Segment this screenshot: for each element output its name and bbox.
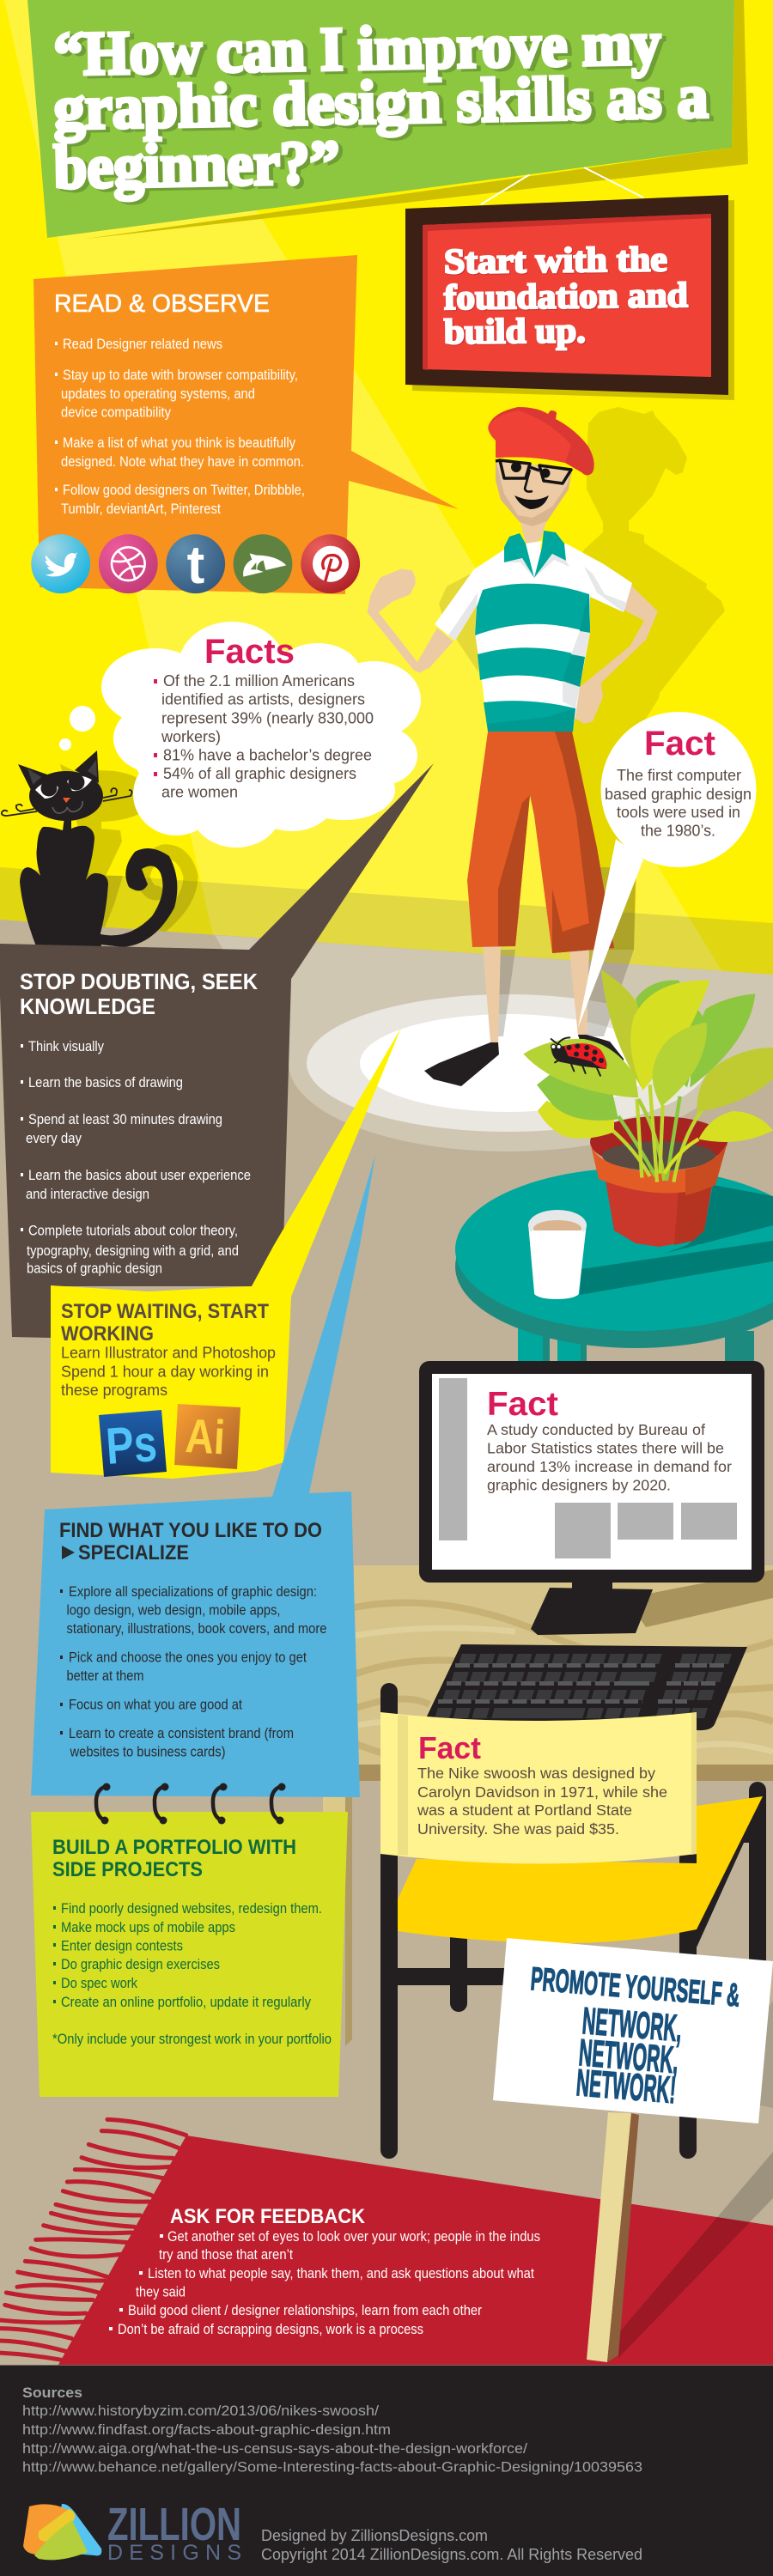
- ladybug: [551, 1037, 606, 1076]
- cat ears: [18, 764, 47, 793]
- cat shadow: [60, 764, 191, 936]
- framed sign: foundation and: [444, 275, 688, 317]
- spotlight beam: [4, 0, 724, 975]
- mouth: [514, 495, 549, 509]
- keyboard: [425, 1644, 747, 1730]
- panel: stop doubting: [0, 763, 434, 1338]
- cat: [2, 750, 177, 947]
- chair back with fact: Fact: [418, 1730, 481, 1765]
- panel: stop waiting: [51, 1028, 401, 1479]
- neck: [520, 519, 547, 545]
- nose: [525, 470, 533, 492]
- panel: facts cloud: 81% have a bachelor’s degree: [163, 747, 372, 764]
- panel: read & observe: READ & OBSERVE: [54, 290, 270, 318]
- panel: build a portfolio: *Only include your strongest work in your portfolio: [52, 2032, 332, 2047]
- chair back with fact: [380, 1712, 697, 1863]
- fact: bureau of labor statistics: Labor Statistics states there will be: [487, 1439, 724, 1456]
- chair back with fact: University. She was paid $35.: [417, 1820, 619, 1838]
- collar: [504, 531, 569, 578]
- icon: dribbble: [99, 534, 158, 593]
- panel: facts cloud: workers): [161, 728, 221, 745]
- panel: build a portfolio: Do spec work: [61, 1976, 138, 1991]
- leaves: [601, 969, 642, 1088]
- ask for feedback text: Listen to what people say, thank them, and ask questions about what: [148, 2266, 534, 2281]
- ask for feedback text: try and those that aren’t: [159, 2247, 293, 2263]
- left shoe: [424, 1042, 499, 1086]
- chair back with fact: was a student at Portland State: [417, 1801, 632, 1819]
- credits: Copyright 2014 ZillionDesigns.com. All Rights Reserved: [261, 2546, 642, 2563]
- panel: read & observe: device compatibility: [61, 405, 172, 421]
- panel: read & observe: Stay up to date with browser compatibility,: [63, 368, 298, 383]
- chair back with fact: The Nike swoosh was designed by: [417, 1765, 655, 1782]
- panel: find what you like: better at them: [67, 1668, 144, 1684]
- cat whiskers: [2, 788, 132, 816]
- panel: stop doubting: Learn the basics of drawing: [28, 1075, 183, 1091]
- panel: facts cloud: represent 39% (nearly 830,000: [161, 709, 374, 726]
- panel: stop waiting: these programs: [61, 1382, 167, 1399]
- table legs: [518, 1322, 754, 1365]
- panel: find what you like: Pick and choose the ones you enjoy to get: [69, 1650, 307, 1666]
- icon: deviantart: [234, 534, 292, 593]
- icon: photoshop: Ps: [104, 1414, 159, 1475]
- title banner: beginner?”: [53, 128, 340, 202]
- panel: facts cloud: [101, 622, 421, 848]
- panel: build a portfolio: BUILD A PORTFOLIO WITH: [52, 1836, 296, 1859]
- shorts: [467, 732, 614, 953]
- beret: [488, 407, 594, 476]
- left leg: [483, 945, 501, 1042]
- stems: [612, 1084, 702, 1182]
- cat tail: [100, 848, 177, 947]
- panel: fact bubble: the 1980’s.: [641, 823, 715, 840]
- sources: http://www.historybyzim.com/2013/06/nikes-swoosh/: [22, 2403, 379, 2419]
- panel: facts cloud: are women: [161, 783, 238, 800]
- framed sign: build up.: [444, 310, 586, 351]
- sources: http://www.behance.net/gallery/Some-Interesting-facts-about-Graphic-Designing/10039563: [22, 2459, 642, 2475]
- ask for feedback text: they said: [136, 2284, 186, 2300]
- panel: stop doubting: Think visually: [28, 1039, 105, 1054]
- cat body: [20, 817, 108, 947]
- panel: read & observe: Read Designer related news: [63, 337, 222, 352]
- glasses: [496, 460, 571, 483]
- panel: build a portfolio: Do graphic design exercises: [61, 1957, 220, 1972]
- panel: fact bubble: [578, 712, 756, 1028]
- panel: find what you like: stationary, illustrations, book covers, and more: [67, 1621, 326, 1637]
- panel: stop doubting: basics of graphic design: [27, 1261, 162, 1276]
- panel: stop doubting: STOP DOUBTING, SEEK: [20, 969, 258, 994]
- panel: build a portfolio: Make mock ups of mobile apps: [61, 1920, 235, 1935]
- panel: build a portfolio: Find poorly designed websites, redesign them.: [61, 1901, 322, 1917]
- fact: bureau of labor statistics: graphic designers by 2020.: [487, 1477, 671, 1494]
- ask for feedback text: ASK FOR FEEDBACK: [170, 2205, 366, 2228]
- frame wires: [481, 167, 643, 204]
- ask for feedback text: Get another set of eyes to look over your work; people in the indus: [167, 2229, 540, 2245]
- lit floor area: [215, 935, 773, 1151]
- panel: fact bubble: The first computer: [617, 767, 741, 784]
- icon: illustrator: Ai: [184, 1408, 227, 1464]
- flower pot: [590, 1116, 727, 1247]
- credits: Designed by ZillionsDesigns.com: [261, 2527, 488, 2544]
- panel: build a portfolio: [31, 1812, 348, 2097]
- cat head: [29, 771, 103, 821]
- panel: fact bubble: based graphic design: [605, 786, 752, 803]
- chair seat: [398, 1796, 763, 1943]
- character shadow on wall: [439, 407, 725, 950]
- panel: fact bubble: tools were used in: [617, 804, 740, 821]
- title banner: [27, 0, 734, 238]
- ask for feedback text: [109, 2205, 540, 2337]
- panel: stop doubting: every day: [26, 1131, 82, 1146]
- panel: facts cloud: 54% of all graphic designers: [163, 765, 356, 782]
- chair back with fact: Carolyn Davidson in 1971, while she: [417, 1783, 667, 1801]
- panel: find what you like: SPECIALIZE: [78, 1541, 189, 1564]
- panel: stop doubting: KNOWLEDGE: [20, 993, 155, 1019]
- icon: pinterest: [301, 534, 360, 593]
- panel: read & observe: [33, 255, 459, 594]
- credits: [261, 2527, 642, 2563]
- fact: bureau of labor statistics: A study conducted by Bureau of: [487, 1421, 705, 1438]
- fact: bureau of labor statistics: Fact: [487, 1386, 558, 1423]
- rug fringe: [0, 2119, 186, 2360]
- logo: ZILLION: [107, 2499, 241, 2550]
- icon: twitter: [31, 534, 90, 593]
- panel: find what you like: logo design, web design, mobile apps,: [67, 1602, 280, 1618]
- panel: read & observe: designed. Note what they have in common.: [61, 454, 304, 470]
- right leg: [569, 949, 589, 1036]
- panel: read & observe: updates to operating systems, and: [61, 386, 255, 402]
- panel: stop doubting: and interactive design: [26, 1187, 149, 1202]
- panel: find what you like: Learn to create a consistent brand (from: [69, 1726, 294, 1741]
- panel: fact bubble: Fact: [644, 725, 715, 762]
- chair frame: [380, 1683, 766, 2159]
- shirt: [435, 544, 632, 732]
- fact: bureau of labor statistics: around 13% increase in demand for: [487, 1458, 732, 1475]
- ask for feedback text: Don’t be afraid of scrapping designs, work is a process: [118, 2322, 423, 2337]
- panel: stop waiting: Spend 1 hour a day working in: [61, 1364, 269, 1381]
- shorts shading: [498, 732, 614, 953]
- panel: build a portfolio: Enter design contests: [61, 1939, 183, 1954]
- sign: promote yourself: [493, 1938, 773, 2362]
- sources: Sources: [22, 2385, 82, 2401]
- icon: tumblr: [166, 534, 225, 595]
- cat nose: [63, 798, 70, 803]
- cat eyes: [35, 775, 92, 799]
- leg shadows on floor: [498, 867, 636, 1036]
- thought bubble dots: [59, 706, 95, 750]
- framed sign: [405, 195, 734, 400]
- floor: [0, 920, 773, 2576]
- framed sign: Start with the: [444, 239, 667, 281]
- coffee cup: [528, 1210, 587, 1299]
- left arm: [368, 569, 453, 672]
- title banner: “How can I improve my: [53, 9, 661, 88]
- rug: [0, 2119, 773, 2365]
- ask for feedback text: Build good client / designer relationships, learn from each other: [128, 2303, 482, 2318]
- wooden board edge: [323, 1790, 352, 2046]
- panel: find what you like: [31, 1155, 375, 1797]
- stripes: [475, 584, 590, 732]
- plant: [523, 969, 773, 1182]
- footer: [0, 2365, 773, 2576]
- desk: [354, 1565, 773, 1781]
- panel: facts cloud: identified as artists, designers: [161, 690, 365, 708]
- sleeve shading: [448, 567, 627, 641]
- eyes: [511, 462, 550, 477]
- character: [368, 407, 658, 1086]
- panel: stop doubting: Learn the basics about user experience: [28, 1168, 251, 1183]
- panel: stop doubting: typography, designing with a grid, and: [27, 1243, 239, 1259]
- face: [496, 459, 572, 526]
- panel: build a portfolio: Create an online portfolio, update it regularly: [61, 1995, 312, 2010]
- sources: http://www.aiga.org/what-the-us-census-says-about-the-design-workforce/: [22, 2440, 527, 2457]
- binder rings: [96, 1783, 285, 1824]
- panel: find what you like: websites to business cards): [70, 1745, 226, 1760]
- monitor: [419, 1361, 764, 1635]
- panel: find what you like: Explore all specializations of graphic design:: [69, 1584, 317, 1600]
- panel: stop waiting: WORKING: [61, 1322, 154, 1346]
- logo: [23, 2499, 241, 2565]
- fact: bureau of labor statistics: [487, 1386, 732, 1494]
- panel: stop waiting: Learn Illustrator and Photoshop: [61, 1345, 276, 1362]
- right arm: [574, 584, 658, 724]
- banner shadow: [86, 0, 748, 239]
- sources: http://www.findfast.org/facts-about-graphic-design.htm: [22, 2421, 391, 2438]
- title banner: graphic design skills as a: [53, 62, 709, 143]
- wall shadow band: [0, 867, 773, 979]
- social icons: [31, 534, 360, 595]
- round teal table: [455, 1168, 773, 1348]
- icon: illustrator: [174, 1404, 240, 1469]
- panel: find what you like: Focus on what you are good at: [69, 1697, 242, 1712]
- panel: find what you like: FIND WHAT YOU LIKE TO DO: [59, 1519, 322, 1542]
- icon: tumblr: t: [187, 536, 204, 595]
- logo: DESIGNS: [107, 2541, 241, 2565]
- panel: read & observe: Follow good designers on Twitter, Dribbble,: [63, 483, 305, 498]
- sources: [22, 2385, 642, 2475]
- panel: build a portfolio: SIDE PROJECTS: [52, 1858, 203, 1881]
- panel: stop waiting: STOP WAITING, START: [61, 1300, 269, 1323]
- panel: read & observe: Tumblr, deviantArt, Pinterest: [61, 501, 221, 517]
- sign post shadow: [618, 2152, 773, 2358]
- panel: facts cloud: Facts: [204, 633, 295, 671]
- cat mouth: [52, 801, 82, 813]
- panel: facts cloud: Of the 2.1 million Americans: [163, 672, 355, 690]
- right shoe: [578, 1035, 624, 1086]
- panel: stop doubting: Complete tutorials about color theory,: [28, 1223, 238, 1238]
- panel: read & observe: Make a list of what you think is beautifully: [63, 435, 296, 451]
- panel: stop doubting: Spend at least 30 minutes drawing: [28, 1112, 222, 1127]
